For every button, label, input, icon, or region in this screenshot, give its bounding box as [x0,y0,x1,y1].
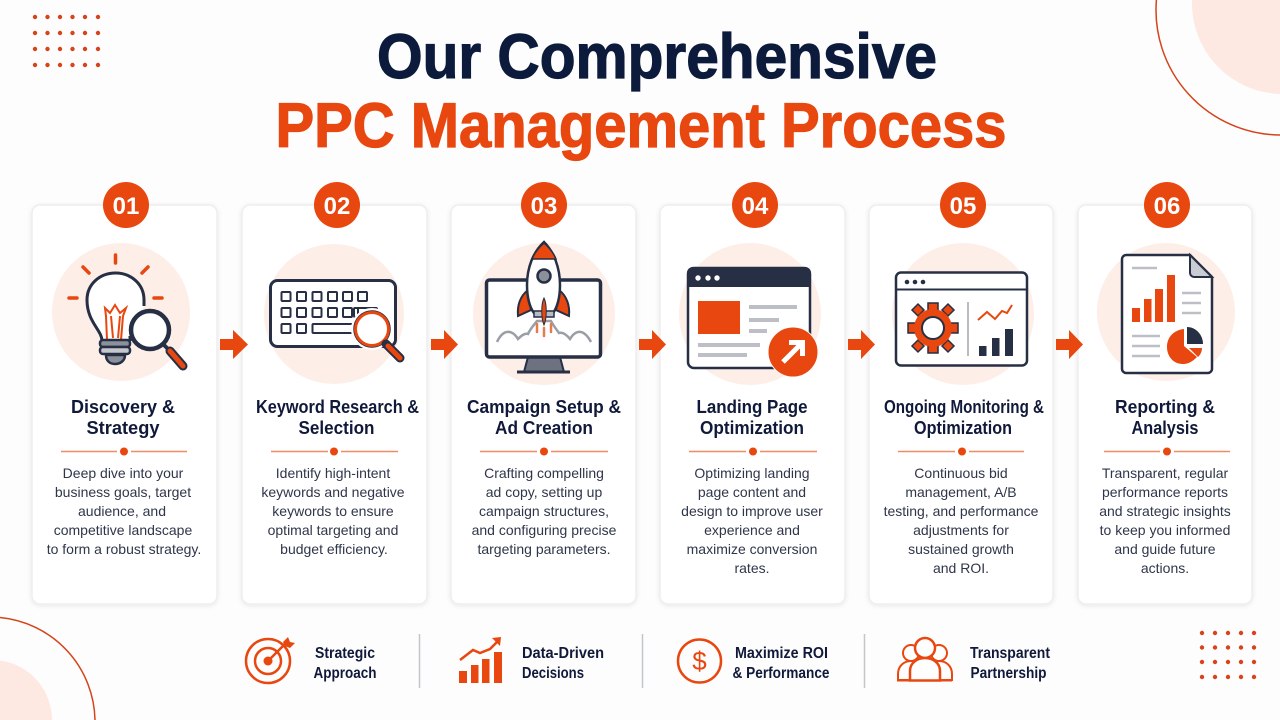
step number 06 [1144,182,1190,228]
step description: Continuous bid [914,465,1008,481]
footer: transparent partnership [897,638,1050,682]
step description [261,465,405,557]
step description: design to improve user [681,503,823,519]
step number 03 [521,182,567,228]
step description: business goals, target [55,484,191,500]
panel: step 6 reporting [1078,205,1252,604]
step description [1099,465,1231,576]
step description: Deep dive into your [63,465,184,481]
step description: page content and [698,484,806,500]
step description: and ROI. [933,560,989,576]
icon: keyboard and magnifier [270,280,400,358]
step number 06: 06 [1154,193,1180,220]
step description: sustained growth [908,541,1014,557]
step description: Transparent, regular [1102,465,1228,481]
footer: transparent partnership: Partnership [970,665,1046,682]
icon: people group [897,638,952,680]
icon: dollar coin [678,640,721,682]
step heading [71,397,175,438]
step description: to form a robust strategy. [47,541,201,557]
step description: experience and [704,522,800,538]
step description: Crafting compelling [484,465,604,481]
step heading: Optimization [914,418,1012,438]
step number 04 [732,182,778,228]
step heading: Ad Creation [495,418,593,438]
step heading: Ongoing Monitoring & [884,397,1044,417]
step description: Optimizing landing [694,465,810,481]
panel: step 5 monitoring [869,205,1053,604]
step number 02 [314,182,360,228]
step heading [696,397,808,438]
step number 05: 05 [950,193,976,220]
step heading: Optimization [700,418,804,438]
panel: step 2 keyword [242,205,427,604]
step description: testing, and performance [884,503,1039,519]
icon: dollar coin: $ [692,646,707,676]
title: PPC Management Process [276,91,1006,161]
panel: step 1 discovery [32,205,217,604]
footer: strategic approach: Approach [314,665,376,682]
step heading: Reporting & [1115,397,1215,417]
arrow 3 [639,330,666,359]
footer: transparent partnership: Transparent [970,645,1050,662]
footer: maximize ROI [678,640,830,682]
arrow 1 [220,330,248,359]
step description: ad copy, setting up [486,484,602,500]
step description: competitive landscape [54,522,192,538]
title [276,22,1006,161]
step description [472,465,617,557]
step description: adjustments for [913,522,1009,538]
step description: keywords and negative [261,484,405,500]
decoration: bottom right dots [1200,631,1256,679]
step description [681,465,823,576]
icon: browser window with arrow badge [687,267,818,377]
step description: maximize conversion [687,541,817,557]
icon: report document with charts [1122,255,1212,373]
step heading [1115,397,1215,438]
panel: step 3 campaign [451,205,636,604]
step heading: Selection [298,418,374,438]
step description: keywords to ensure [272,503,394,519]
step description: Identify high-intent [276,465,390,481]
step heading: Landing Page [696,397,808,417]
step number 03: 03 [531,193,557,220]
arrow 5 [1056,330,1083,359]
panel: step 4 landing page [660,205,845,604]
step description [884,465,1039,576]
decoration: top left dots [33,15,100,67]
step description: optimal targeting and [268,522,398,538]
footer: maximize ROI: Maximize ROI [735,645,828,662]
title: Our Comprehensive [377,22,937,92]
arrow 2 [431,330,458,359]
step heading: Keyword Research & [256,397,419,417]
step description: and strategic insights [1099,503,1231,519]
step description: and configuring precise [472,522,617,538]
step heading: Campaign Setup & [467,397,621,417]
step description: rates. [734,560,770,576]
decoration: top right circles [1156,0,1280,135]
step description: and guide future [1114,541,1216,557]
step heading [884,397,1044,438]
step heading: Analysis [1132,418,1198,438]
step heading [467,397,621,438]
footer: data-driven decisions [459,637,604,683]
step heading: Discovery & [71,397,175,417]
step description [47,465,201,557]
step number 02: 02 [324,193,350,220]
icon: target [246,637,295,683]
icon: rocket launching from monitor [486,242,600,374]
icon: light bulb and magnifier [69,255,183,366]
step number 01: 01 [113,193,139,220]
footer: strategic approach: Strategic [315,645,375,662]
decoration: bottom left circles [0,618,95,720]
footer: maximize ROI: & Performance [732,665,830,682]
step description: audience, and [78,503,166,519]
step heading [256,397,419,438]
step description: targeting parameters. [477,541,611,557]
step description: budget efficiency. [280,541,388,557]
step description: management, A/B [905,484,1017,500]
footer: data-driven decisions: Data-Driven [522,645,604,662]
step number 01 [103,182,149,228]
step description: to keep you informed [1100,522,1230,538]
step heading: Strategy [86,418,160,438]
step description: performance reports [1102,484,1228,500]
step number 05 [940,182,986,228]
footer: data-driven decisions: Decisions [522,665,584,682]
step description: actions. [1141,560,1189,576]
icon: dashboard with gear and charts [896,272,1027,366]
icon: rising bar chart [459,637,502,683]
arrow 4 [848,330,875,359]
step number 04: 04 [742,193,769,220]
footer: strategic approach [246,637,376,683]
step description: campaign structures, [479,503,609,519]
